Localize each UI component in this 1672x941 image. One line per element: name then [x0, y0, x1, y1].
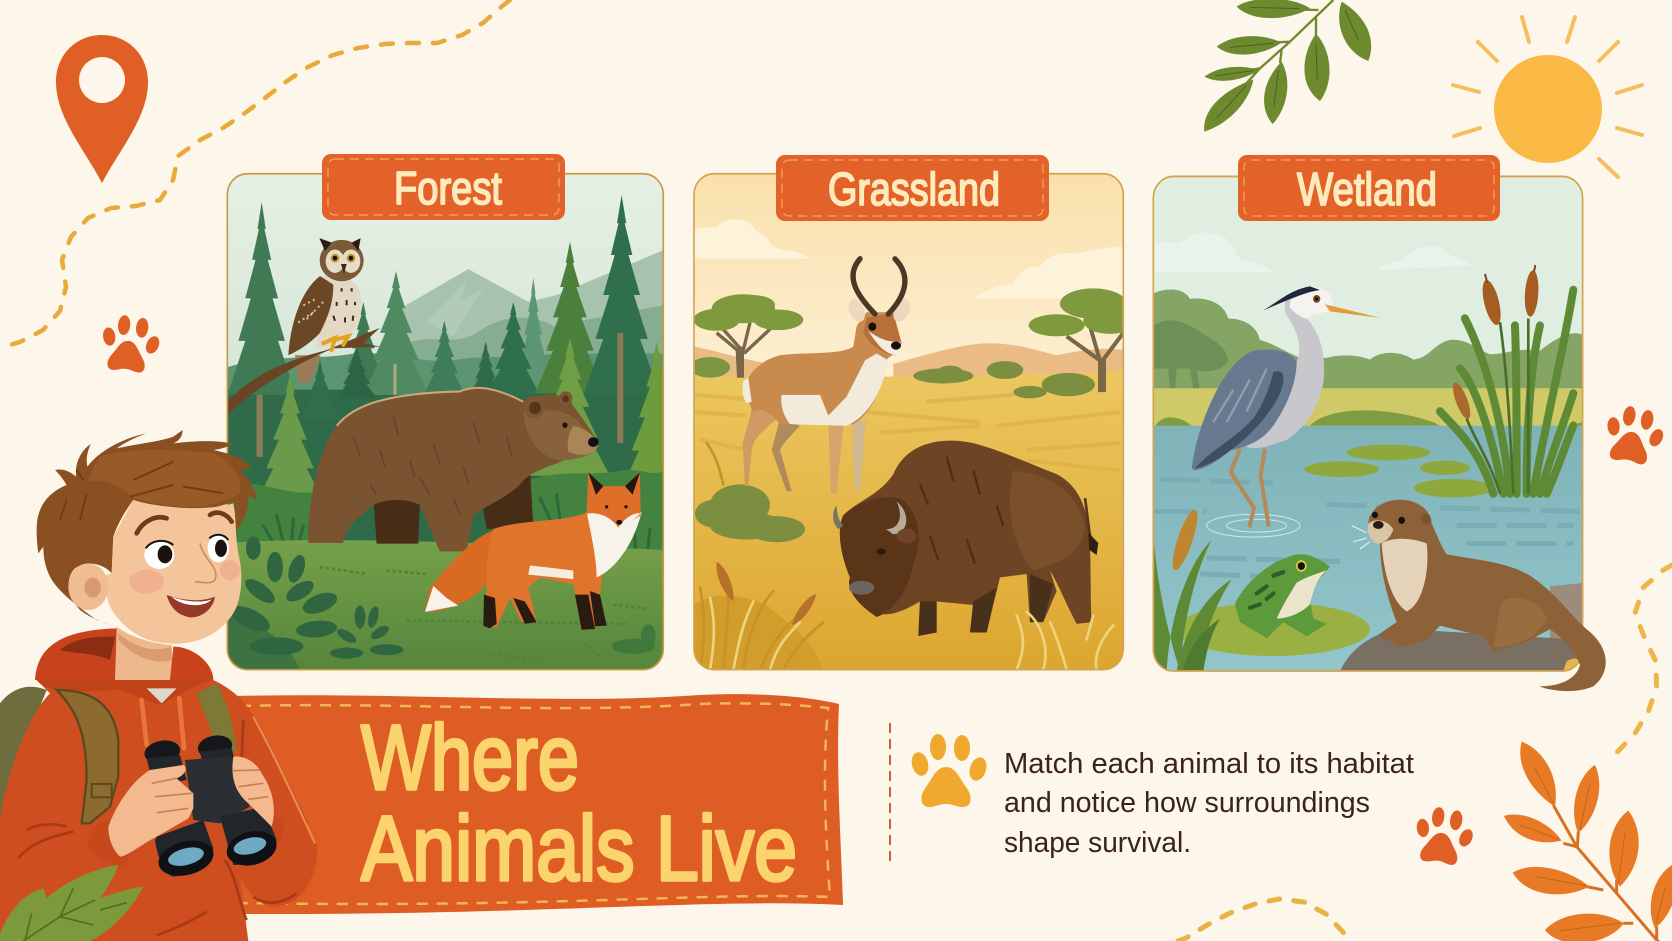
clouds — [694, 219, 1123, 298]
cheeks — [129, 570, 164, 594]
grassland sky — [694, 174, 1123, 387]
title: Where — [361, 707, 579, 809]
banner — [235, 694, 843, 914]
forest sky — [228, 174, 662, 367]
forest foliage — [227, 536, 656, 670]
grassland card border — [694, 174, 1123, 670]
icon: location pin — [56, 35, 148, 183]
lily pads — [1304, 445, 1493, 497]
icon: sun — [1453, 17, 1642, 177]
backpack — [0, 687, 47, 941]
heron — [1192, 286, 1380, 527]
text block: instructions: and notice how surroundings — [1004, 787, 1370, 819]
forest ground — [227, 540, 663, 670]
boy head — [35, 430, 256, 680]
face — [100, 500, 241, 644]
reeds — [1440, 265, 1573, 494]
rocks — [1550, 583, 1583, 640]
drawstrings — [142, 698, 184, 748]
hands — [108, 756, 274, 857]
sleeve cuffs — [87, 820, 132, 867]
label: grassland — [776, 155, 1049, 221]
icon: paw right — [1600, 402, 1669, 468]
title: Animals Live — [361, 798, 797, 900]
label: wetland: Wetland — [1297, 163, 1437, 215]
hoodie — [0, 680, 317, 941]
bear — [308, 388, 599, 552]
label: forest — [322, 154, 565, 220]
binoculars — [143, 733, 280, 881]
dashed trail: top left — [0, 0, 510, 348]
icon: paw lower — [1410, 804, 1478, 868]
dashed trail: bottom — [1178, 899, 1347, 941]
foreground grass — [694, 443, 1113, 670]
big lily pad and left reeds — [1153, 507, 1370, 671]
hair — [37, 430, 256, 627]
forest undergrowth — [228, 470, 662, 550]
forest card border — [227, 174, 663, 670]
dashed trail: right — [1613, 565, 1672, 757]
icon: olive branch — [1204, 0, 1371, 132]
pond — [1153, 426, 1583, 672]
owl — [288, 238, 364, 355]
hood collar — [37, 680, 213, 705]
panel: forest — [227, 174, 693, 670]
wetland clouds — [1153, 233, 1473, 272]
backpack straps — [57, 690, 118, 823]
wetland card border — [1153, 176, 1583, 671]
nose — [195, 543, 216, 583]
otter — [1352, 500, 1606, 691]
wetland meadow — [1154, 388, 1582, 426]
boy explorer — [0, 430, 317, 941]
foreground leaf — [0, 865, 143, 941]
bushes — [695, 361, 1095, 542]
title — [361, 707, 797, 900]
fox — [425, 472, 642, 630]
hood — [35, 628, 117, 680]
wetland sky — [1154, 178, 1582, 360]
text block: instructions: shape survival. — [1004, 827, 1191, 859]
label: wetland — [1238, 155, 1500, 221]
mouth — [167, 595, 215, 617]
label: grassland: Grassland — [828, 163, 1000, 215]
divider — [889, 723, 891, 866]
label: forest: Forest — [394, 162, 502, 214]
panel: grassland — [690, 174, 1137, 670]
acacia left — [690, 294, 803, 378]
icon: paw left — [98, 313, 164, 375]
icon: orange branch — [1504, 742, 1672, 941]
frog — [1235, 554, 1330, 638]
text block: instructions: Match each animal to its habitat — [1004, 748, 1414, 780]
text block: instructions — [1004, 748, 1414, 859]
icon: yellow paw — [909, 734, 989, 807]
owl tail — [295, 355, 321, 383]
pronghorn — [743, 259, 913, 493]
panel: wetland — [1153, 176, 1606, 691]
distant treeline — [1153, 289, 1583, 397]
hills — [694, 343, 1122, 377]
eyes — [144, 541, 174, 569]
forest mountain — [402, 250, 662, 342]
acacia right — [1028, 288, 1122, 392]
bison — [833, 441, 1098, 636]
branch — [227, 328, 380, 416]
brows — [137, 513, 232, 533]
boy body — [0, 680, 317, 941]
far trees — [227, 195, 693, 560]
neck — [113, 627, 173, 680]
ear — [68, 563, 108, 610]
grassland ground — [694, 371, 1123, 670]
